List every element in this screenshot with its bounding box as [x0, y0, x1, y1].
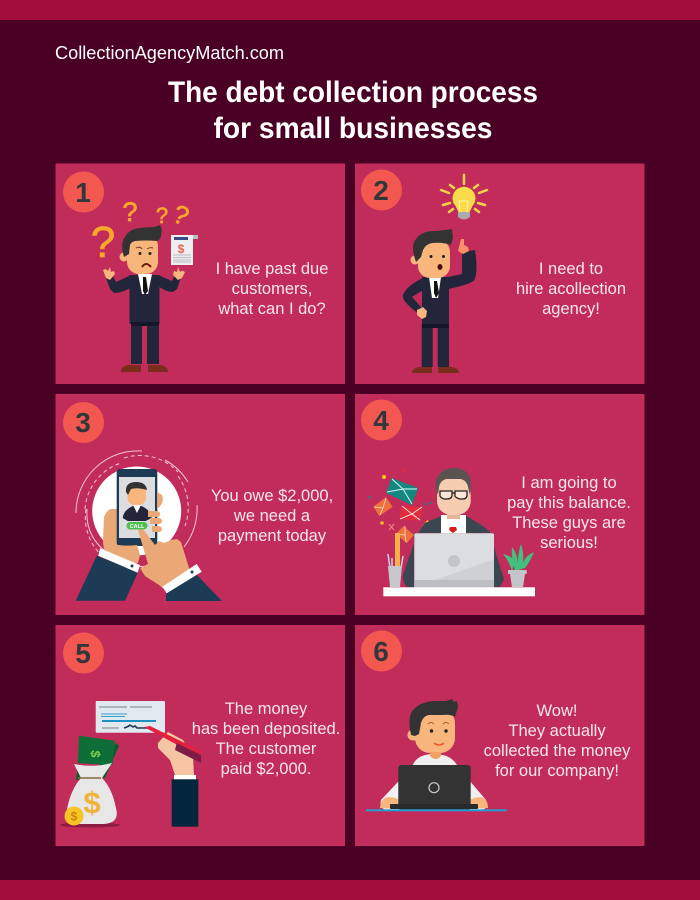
- text: going to pay: serious!: [540, 534, 598, 552]
- panel 3: phone call: [56, 394, 345, 615]
- icon: invoice: $: [178, 242, 185, 256]
- text: wow: [484, 702, 631, 780]
- text: past due: [216, 260, 328, 318]
- phone and hands illustration: [76, 451, 222, 601]
- text: going to pay: I am going to: [521, 474, 617, 492]
- money bag: $: [71, 810, 78, 824]
- text: hire agency: [516, 260, 626, 318]
- text: going to pay: These guys are: [512, 514, 626, 532]
- money bag: $: [83, 785, 101, 820]
- number badge 5: 5: [75, 638, 91, 669]
- money bag: $: [88, 750, 103, 759]
- top band: [0, 0, 700, 20]
- title: [168, 76, 538, 145]
- text: you owe: [211, 487, 333, 545]
- number badge 6: [361, 630, 402, 672]
- number badge 1: [63, 172, 104, 212]
- number badge 3: [63, 402, 104, 443]
- text: wow: Wow!: [537, 702, 577, 720]
- cheque: [96, 701, 165, 733]
- text: hire agency: hire acollection: [516, 280, 626, 298]
- number badge 4: [361, 400, 402, 440]
- pencil cup: [388, 533, 403, 587]
- question marks: ?: [91, 218, 115, 267]
- man at laptop: [403, 468, 504, 587]
- text: you owe: payment today: [218, 527, 327, 545]
- hand with pen: [144, 726, 201, 827]
- number badge 6: 6: [373, 636, 389, 667]
- text: deposited: The money: [225, 700, 308, 718]
- flying envelopes: [368, 468, 433, 543]
- text: deposited: has been deposited.: [192, 720, 340, 738]
- desk: [383, 587, 535, 596]
- panel 2: hire a collection agency: [355, 164, 644, 384]
- text: deposited: [192, 700, 340, 778]
- panel 1: past due customers: [56, 164, 345, 384]
- text: past due: customers,: [232, 280, 312, 298]
- text: wow: They actually: [508, 722, 606, 740]
- businessman with idea: [403, 229, 476, 373]
- icon: invoice: [171, 235, 198, 265]
- text: going to pay: [507, 474, 631, 552]
- question marks: ?: [122, 197, 138, 227]
- bottom band: [0, 880, 700, 900]
- title: for small businesses: [214, 112, 492, 145]
- text: past due: I have past due: [216, 260, 328, 278]
- phone and hands illustration: CALL: [130, 524, 145, 530]
- question marks: ?: [169, 198, 193, 232]
- happy man with laptop: [380, 699, 488, 810]
- text: wow: collected the money: [484, 742, 631, 760]
- text: you owe: we need a: [233, 507, 311, 525]
- website name: CollectionAgencyMatch.com: [55, 43, 284, 63]
- question marks: ?: [156, 203, 168, 228]
- number badge 3: 3: [75, 407, 91, 438]
- number badge 1: 1: [75, 177, 91, 208]
- worried businessman: [103, 225, 185, 372]
- plant: [503, 544, 534, 587]
- icon: light bulb: [441, 175, 487, 220]
- text: deposited: paid $2,000.: [221, 760, 311, 778]
- money bag: [60, 736, 120, 828]
- number badge 5: [63, 632, 104, 674]
- number badge 4: 4: [373, 405, 389, 436]
- text: you owe: You owe $2,000,: [211, 487, 333, 505]
- text: past due: what can I do?: [217, 300, 326, 318]
- panel 5: money deposited: [56, 625, 345, 846]
- panel 4: paying the balance: [355, 394, 644, 615]
- text: hire agency: agency!: [542, 300, 600, 318]
- panel 6: collected the money: [355, 625, 644, 846]
- title: The debt collection process: [168, 76, 538, 109]
- text: hire agency: I need to: [539, 260, 603, 278]
- blue desk line: [366, 809, 507, 811]
- number badge 2: 2: [373, 175, 389, 206]
- text: wow: for our company!: [495, 762, 619, 780]
- question marks: [91, 197, 193, 267]
- text: going to pay: pay this balance.: [507, 494, 631, 512]
- number badge 2: [361, 170, 402, 210]
- text: deposited: The customer: [216, 740, 317, 758]
